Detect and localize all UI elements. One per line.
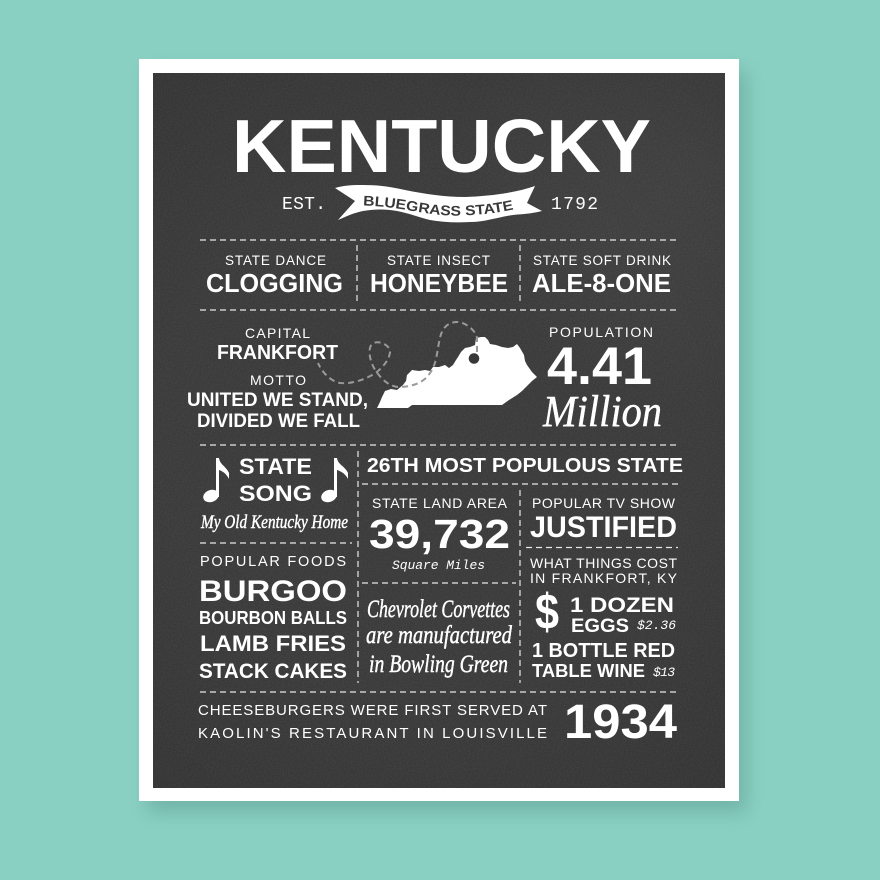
founding year: 1792: [551, 195, 598, 215]
population: [542, 324, 662, 436]
capital: CAPITAL: [245, 325, 310, 341]
state land area: STATE LAND AREA: [372, 495, 508, 511]
Corvette fact: in Bowling Green: [369, 651, 508, 678]
what things cost: [530, 555, 678, 681]
icon: music note left: [201, 458, 229, 504]
state insect: [370, 253, 508, 298]
population: POPULATION: [549, 324, 653, 340]
what things cost: 1 DOZEN: [570, 594, 674, 617]
state soft drink: STATE SOFT DRINK: [533, 253, 671, 268]
banner ribbon: [335, 185, 542, 222]
state song: SONG: [239, 481, 312, 506]
popular foods: BURGOO: [199, 575, 347, 608]
capital: FRANKFORT: [217, 342, 338, 364]
what things cost: IN FRANKFORT, KY: [530, 570, 678, 586]
state dance: STATE DANCE: [225, 253, 326, 268]
Corvette fact: Chevrolet Corvettes: [367, 596, 510, 623]
motto: DIVIDED WE FALL: [197, 410, 360, 432]
what things cost: TABLE WINE: [532, 661, 645, 681]
what things cost: EGGS: [571, 616, 629, 637]
Corvette fact: [366, 596, 512, 678]
state song: [200, 454, 348, 533]
banner text: BLUEGRASS STATE: [364, 196, 514, 216]
dashed flight route: [318, 322, 477, 387]
paper shadow: [147, 71, 747, 813]
panel: chalkboard: [153, 73, 725, 788]
year 1934: 1934: [564, 696, 677, 749]
popular foods: STACK CAKES: [199, 660, 347, 683]
capital marker: [469, 353, 479, 364]
icon: music note right: [319, 458, 348, 504]
motto: [187, 372, 368, 432]
population: Million: [542, 387, 662, 436]
state land area: [369, 495, 510, 573]
cheeseburger fact: KAOLIN'S RESTAURANT IN LOUISVILLE: [198, 725, 547, 742]
cheeseburger fact: [198, 702, 547, 742]
motto: UNITED WE STAND,: [187, 389, 368, 411]
state song: STATE: [239, 454, 312, 479]
popular foods: BOURBON BALLS: [199, 608, 347, 628]
white poster frame: [139, 59, 739, 801]
Corvette fact: are manufactured: [366, 622, 512, 649]
state soft drink: [532, 253, 671, 298]
established line with banner: [282, 185, 598, 222]
cheeseburger fact: CHEESEBURGERS WERE FIRST SERVED AT: [198, 702, 547, 719]
state song: My Old Kentucky Home: [200, 512, 348, 533]
established label: EST.: [282, 195, 326, 215]
state land area: 39,732: [369, 511, 510, 557]
popular foods: POPULAR FOODS: [200, 554, 346, 570]
popular TV show: POPULAR TV SHOW: [532, 495, 676, 511]
state insect: HONEYBEE: [370, 270, 508, 298]
capital: [217, 325, 338, 364]
popular foods: [199, 554, 347, 683]
population: 4.41: [547, 337, 652, 396]
state land area: Square Miles: [392, 558, 485, 573]
popular TV show: JUSTIFIED: [530, 511, 677, 544]
state soft drink: ALE-8-ONE: [532, 270, 671, 298]
icon: Kentucky silhouette: [377, 337, 537, 408]
26th most populous: 26TH MOST POPULOUS STATE: [367, 455, 683, 477]
map of Kentucky with dashed route: [318, 322, 537, 408]
popular foods: LAMB FRIES: [200, 631, 346, 656]
motto: MOTTO: [250, 372, 306, 388]
title: KENTUCKY: [232, 104, 651, 188]
what things cost: $2.36: [637, 618, 676, 633]
what things cost: WHAT THINGS COST: [530, 555, 677, 571]
icon: dollar sign: $: [535, 584, 559, 640]
popular TV show: [530, 495, 677, 544]
what things cost: 1 BOTTLE RED: [532, 640, 675, 662]
state insect: STATE INSECT: [387, 253, 490, 268]
what things cost: $13: [653, 665, 675, 680]
state dance: CLOGGING: [206, 270, 343, 298]
state dance: [206, 253, 343, 298]
